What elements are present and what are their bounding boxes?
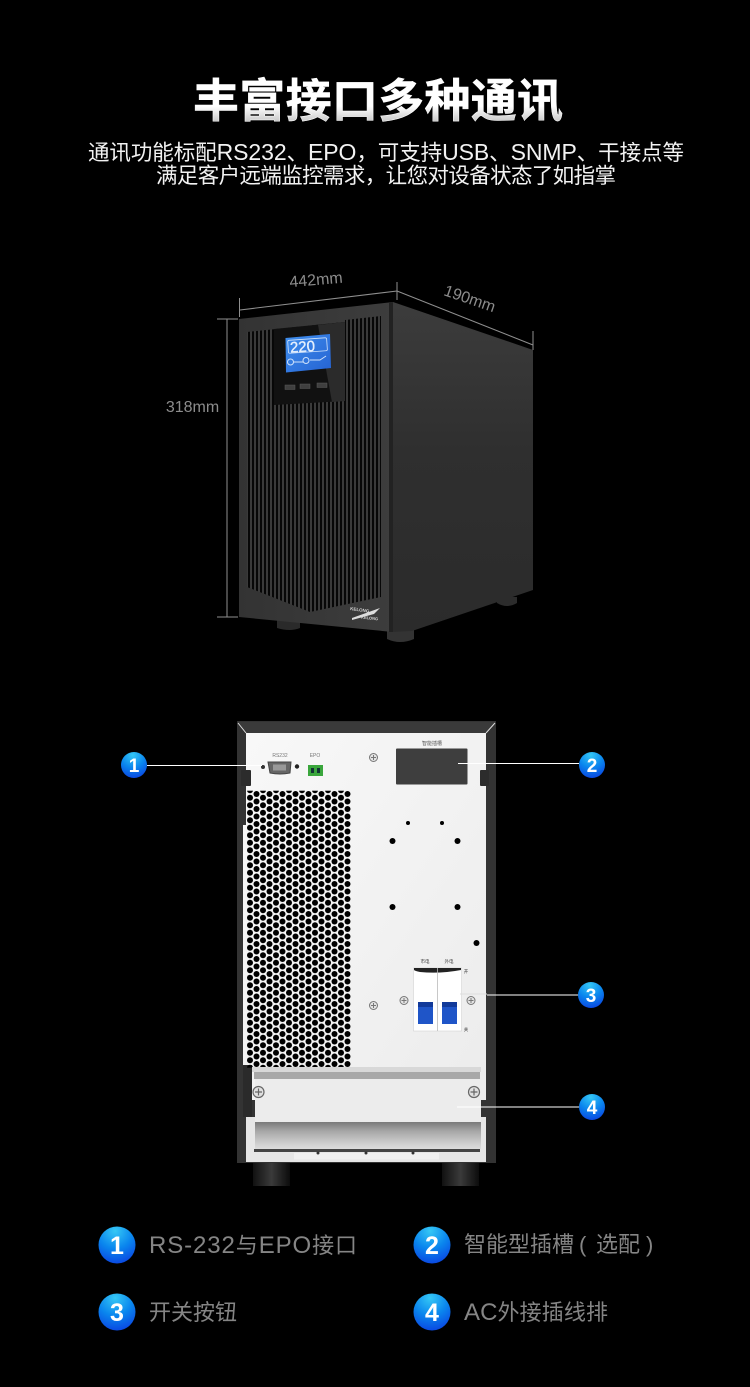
callout 2 <box>458 752 605 778</box>
EPO port <box>308 753 323 776</box>
outer frame <box>237 721 496 1163</box>
dimension: height 318mm <box>166 319 238 617</box>
front view UPS with dimensions <box>166 270 533 642</box>
legend item 4 <box>414 1294 608 1330</box>
screws <box>370 754 475 1010</box>
intelligent slot <box>396 740 468 784</box>
lower dark band <box>243 1065 252 1117</box>
frame corner highlights <box>238 723 495 733</box>
buttons <box>285 383 327 390</box>
side handles <box>241 770 489 786</box>
callout 4: 4 <box>587 1098 598 1119</box>
legend item 4: 4 <box>425 1299 439 1327</box>
display bezel <box>274 322 345 405</box>
callout 3: 3 <box>586 986 596 1007</box>
front panel corner strip <box>389 302 393 632</box>
LCD screen: 220 <box>289 338 316 357</box>
rear feet <box>253 1163 479 1186</box>
callout 1: 1 <box>129 756 140 777</box>
feet <box>277 597 517 642</box>
EPO port: EPO <box>310 753 320 759</box>
legend item 1: RS-232与EPO接口 <box>149 1232 357 1259</box>
subtitle: 满足客户远端监控需求，让您对设备状态了如指掌 <box>156 164 616 188</box>
callout 1 <box>121 752 262 778</box>
dimension: width 442mm <box>240 270 397 317</box>
circuit breaker: 关 <box>464 1026 469 1033</box>
top frame <box>238 722 495 733</box>
RS232 port: RS232 <box>272 753 288 759</box>
legend item 1: 1 <box>110 1232 124 1260</box>
subtitle <box>88 139 684 188</box>
white rear panel <box>243 733 486 1100</box>
mounting holes <box>390 821 480 946</box>
title: 丰富接口多种通讯 <box>193 75 563 127</box>
legend item 2: 选配 <box>596 1232 640 1257</box>
lower white panel <box>246 1117 486 1162</box>
rear view UPS <box>237 721 496 1186</box>
RS232 port <box>261 753 299 774</box>
callout 4 <box>457 1094 605 1120</box>
legend item 3: 开关按钮 <box>149 1300 237 1325</box>
legend item 4: AC外接插线排 <box>464 1299 608 1326</box>
circuit breaker: 开 <box>464 969 469 975</box>
dimension: height 318mm: 318mm <box>166 399 219 416</box>
circuit breaker: 外电 <box>444 958 454 965</box>
legend item 2 <box>414 1226 653 1264</box>
side panel <box>392 302 533 632</box>
logo <box>350 606 380 621</box>
callout 2: 2 <box>587 756 597 777</box>
legend item 1 <box>98 1226 357 1264</box>
logo: KELONG <box>361 615 378 621</box>
legend item 2: 2 <box>425 1232 439 1260</box>
subtitle: 通讯功能标配RS232、EPO，可支持USB、SNMP、干接点等 <box>88 139 684 165</box>
intelligent slot: 智能插槽 <box>422 740 442 747</box>
logo: KELONG <box>350 606 370 614</box>
front panel <box>239 302 393 632</box>
dimension: depth 190mm: 190mm <box>442 283 498 316</box>
vent grille <box>247 316 381 612</box>
legend item 2: 智能型插槽 <box>464 1232 574 1257</box>
legend item 3 <box>98 1294 237 1330</box>
circuit breaker: 市电 <box>420 958 430 965</box>
perforated vent <box>247 791 351 1068</box>
dimension: width 442mm: 442mm <box>289 270 343 291</box>
circuit breaker <box>414 958 469 1033</box>
legend item 2: ) <box>646 1232 653 1257</box>
AC power strip cover <box>252 1067 481 1160</box>
callout 3 <box>460 982 604 1008</box>
dimension: depth 190mm <box>397 283 533 350</box>
legend item 2: ( <box>579 1232 587 1257</box>
legend item 3: 3 <box>110 1299 124 1327</box>
